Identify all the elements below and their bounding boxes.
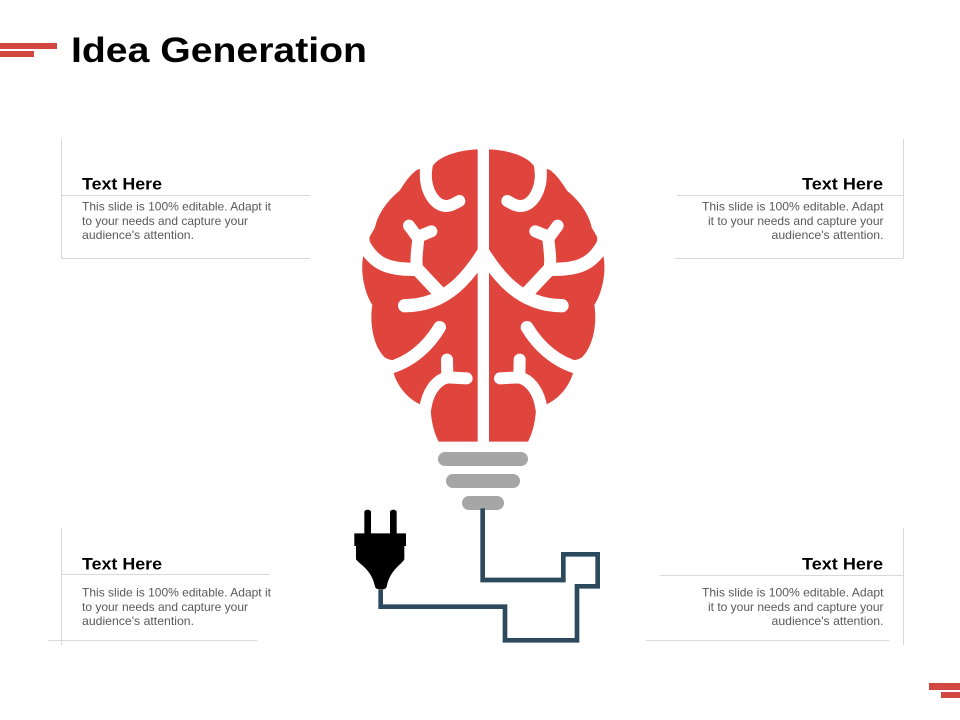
text block: top right: This slide is 100% editable. Adapt	[702, 200, 884, 214]
text block: bottom left: audience's attention.	[82, 615, 194, 628]
panel: top left	[61, 139, 310, 258]
brain left hemisphere	[362, 149, 491, 442]
text block: bottom left: This slide is 100% editable. Adapt it	[82, 586, 272, 600]
text block: bottom right: This slide is 100% editable. Adapt	[702, 586, 884, 600]
icon: bulb base	[438, 452, 528, 510]
cable	[381, 508, 598, 640]
panel: bottom right	[646, 528, 904, 645]
heading: bottom right: Text Here	[802, 556, 883, 574]
panel: top right	[675, 139, 904, 258]
decorative header bars	[0, 43, 57, 57]
heading: top left: Text Here	[82, 176, 162, 194]
icon: plug	[354, 510, 406, 590]
text block: top right: audience's attention.	[772, 229, 884, 242]
text block: bottom right: audience's attention.	[772, 615, 884, 628]
title: Idea Generation	[71, 31, 367, 70]
text block: top right: it to your needs and capture your	[708, 215, 884, 228]
text block: top left: audience's attention.	[82, 229, 194, 242]
panel: bottom left	[48, 528, 272, 645]
text block: top right	[702, 200, 884, 242]
text block: bottom left: to your needs and capture your	[82, 601, 248, 614]
icon: brain light bulb	[362, 149, 604, 442]
text block: top left: to your needs and capture your	[82, 215, 248, 228]
text block: bottom right	[702, 586, 884, 628]
text block: top left	[82, 200, 272, 242]
decorative footer bars	[929, 683, 960, 698]
text block: bottom left	[82, 586, 272, 628]
heading: bottom left: Text Here	[82, 556, 162, 574]
text block: bottom right: it to your needs and capture your	[708, 601, 884, 614]
brain right hemisphere	[476, 149, 604, 442]
heading: top right: Text Here	[802, 176, 883, 194]
text block: top left: This slide is 100% editable. Adapt it	[82, 200, 272, 214]
